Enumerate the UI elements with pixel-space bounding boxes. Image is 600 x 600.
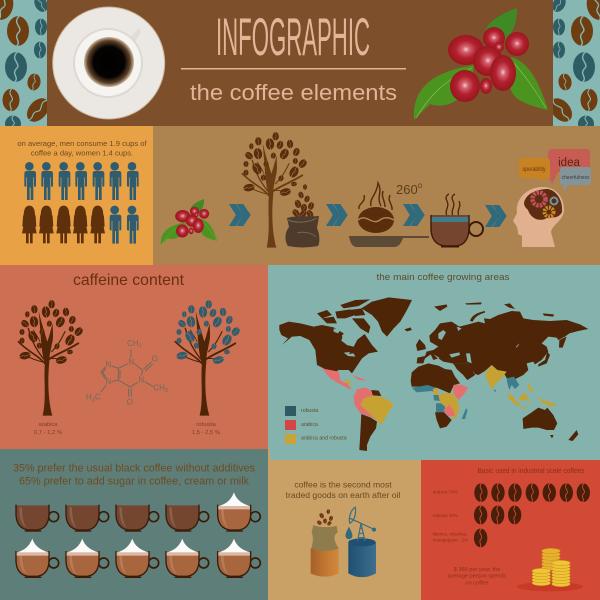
text: yearly spend: average person spends	[448, 574, 506, 580]
panel: header side pattern left	[0, 0, 53, 132]
text: consumption: coffee a day, women 1.4 cups.	[31, 148, 133, 158]
label: robusta: robusta	[196, 422, 216, 428]
chart: caffeine molecule: N	[138, 375, 144, 384]
panel: caffeine content	[0, 265, 268, 449]
chart: caffeine molecule: O	[127, 397, 133, 406]
text: preferences: 65% prefer to add sugar in coffee, cream or milk	[19, 476, 250, 488]
icon: arabica tree	[18, 300, 84, 416]
chart: caffeine molecule: 3	[165, 388, 168, 394]
icon: coffee barrel and oil barrel	[311, 507, 376, 577]
world map	[279, 297, 588, 451]
map: Eurasia, Africa, Australia	[411, 302, 588, 441]
icon: head with gears and speech bubbles	[513, 149, 591, 247]
arrow	[326, 204, 348, 226]
text: consumption: on average, men consume 1.9 cups of	[17, 139, 147, 148]
people pictogram	[22, 162, 139, 244]
chart: caffeine molecule: N	[105, 377, 111, 386]
icon: small berries	[161, 199, 217, 245]
map: Americas	[279, 297, 412, 451]
icon: roasting bean in pan	[349, 183, 429, 247]
icon: head with gears and speech bubbles: cheerfulness	[562, 175, 590, 181]
legend: map	[285, 406, 347, 444]
divider line	[181, 68, 406, 70]
chart: bean pictogram: arabica 70%	[433, 490, 458, 495]
text: yearly spend: $ 360 per year, the	[454, 567, 500, 573]
panel: header: INFOGRAPHIC	[216, 8, 370, 67]
chart: bean pictogram: liberica, eksehsa,	[433, 531, 467, 536]
panel: header side pattern right	[546, 0, 600, 132]
icon: robusta tree	[175, 300, 241, 416]
subtitle: the coffee elements	[190, 80, 397, 105]
panel: milk preferences	[0, 449, 270, 600]
label: arabica: arabica	[38, 422, 58, 428]
panel: coffee process	[153, 126, 600, 265]
panel: consumption by gender	[0, 126, 153, 265]
text: preferences	[13, 462, 256, 488]
label: robusta: 1,5 - 2,5 %	[192, 430, 220, 436]
chart: caffeine molecule: 3	[139, 344, 142, 350]
icon: head with gears and speech bubbles: idea	[558, 157, 580, 169]
chart: caffeine molecule: C	[95, 393, 101, 402]
text: traded goods: traded goods on earth after oil	[286, 490, 400, 500]
panel: growing areas	[268, 265, 600, 460]
arrow	[229, 204, 251, 226]
heading: caffeine content: caffeine content	[73, 272, 185, 289]
text: temperature: o	[418, 181, 423, 190]
text: preferences: 35% prefer the usual black coffee without additives	[13, 462, 256, 474]
chart: caffeine molecule: CH	[127, 339, 139, 348]
panel: header	[47, 0, 553, 126]
panel: traded goods	[270, 460, 421, 600]
arrow	[403, 204, 425, 226]
heading: industrial coffees: Basic used in industrial scale coffees	[478, 468, 585, 475]
chart: caffeine molecule: CH	[153, 383, 165, 392]
icon: coffee tree	[242, 132, 308, 248]
chart: bean pictogram: robusta 30%	[433, 513, 458, 518]
icon: cup of coffee	[431, 194, 483, 248]
icon: coffee berries	[414, 8, 548, 120]
text: traded goods: coffee is the second most	[294, 480, 392, 490]
icon: head with gears and speech bubbles: operability	[522, 166, 546, 173]
chart: caffeine molecule	[86, 339, 168, 406]
text: yearly spend: on coffee	[466, 580, 488, 586]
chart: caffeine molecule: 3	[92, 397, 95, 403]
icon: sack of beans	[285, 184, 319, 248]
label: arabica: 0,7 - 1,2 %	[34, 430, 62, 436]
legend: map: arabica	[301, 422, 318, 428]
icon: coin stacks	[517, 548, 583, 591]
chart: bean pictogram: maragogype - 2%	[433, 538, 468, 543]
heading: growing areas: the main coffee growing areas	[376, 272, 510, 283]
legend: map: arabica and robusta	[301, 435, 347, 441]
panel: industrial coffees	[421, 460, 600, 600]
chart: bean pictogram	[433, 483, 590, 547]
cups pictogram	[16, 492, 260, 578]
text: temperature: 260	[396, 182, 418, 197]
chart: caffeine molecule: N	[128, 357, 134, 366]
legend: map: robusta	[301, 408, 318, 414]
chart: caffeine molecule: O	[152, 355, 158, 364]
icon: coffee cup from above	[53, 7, 165, 119]
chart: caffeine molecule: H	[86, 393, 92, 402]
arrow	[485, 205, 507, 227]
text: traded goods	[286, 480, 400, 500]
chart: caffeine molecule: N	[105, 360, 111, 369]
